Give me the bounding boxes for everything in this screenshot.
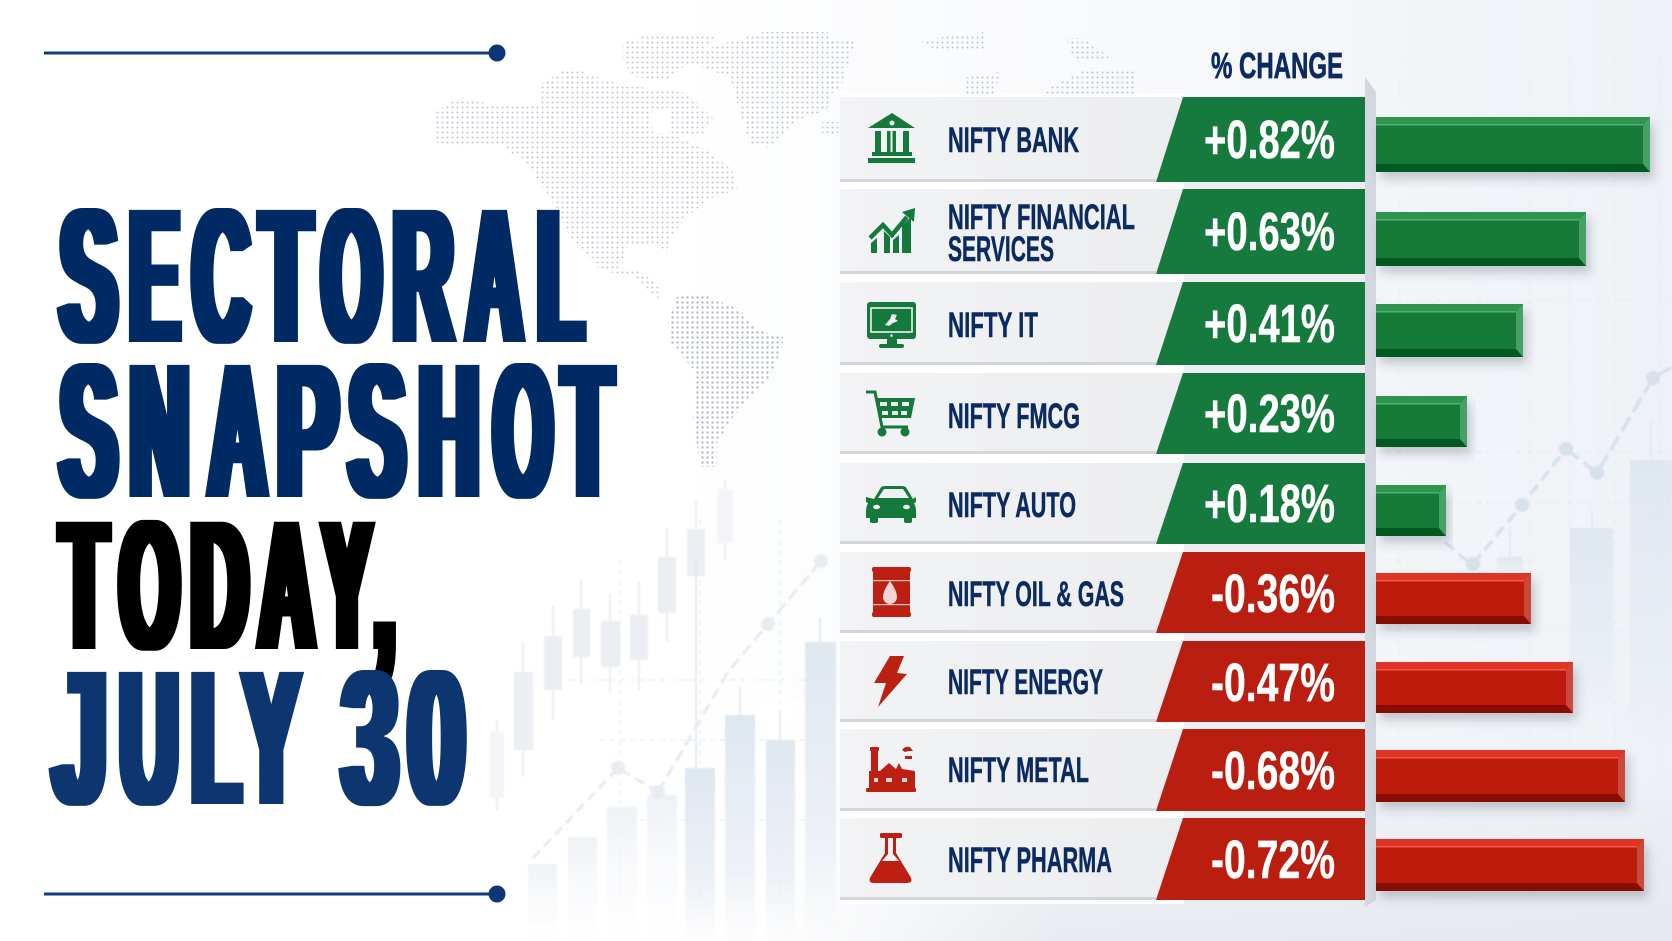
row: Nifty FMCG: +0.23% [1204,384,1335,444]
row: Nifty FMCG: NIFTY FMCG [948,397,1080,436]
row: Nifty Oil & Gas: -0.36% [1211,564,1335,624]
title: SECTORAL SNAPSHOT TODAY, JULY 30: N [130,323,189,538]
icon: rising chart [870,208,915,253]
title: SECTORAL SNAPSHOT TODAY, JULY 30: R [393,168,453,383]
table spine and backing [840,77,1376,907]
row: Nifty Financial Services: +0.63% [1204,202,1335,262]
title: SECTORAL SNAPSHOT TODAY, JULY 30: L [538,168,583,383]
row: Nifty Pharma [840,818,1365,900]
bottom rule with end dot [44,886,506,902]
bar: Nifty Energy -0.47% [1376,662,1573,713]
icon: shopping cart [866,392,915,436]
bar: Nifty Metal -0.68% [1376,750,1625,802]
row: Nifty Auto [840,463,1365,544]
bar: Nifty FMCG +0.23% [1376,396,1467,447]
dotted world map [433,32,1136,467]
icon: flask [870,833,911,883]
icon: computer monitor [867,302,916,348]
title: SECTORAL SNAPSHOT TODAY, JULY 30: T [61,483,107,689]
title: SECTORAL SNAPSHOT TODAY, JULY 30: 0 [408,630,465,845]
icon: oil barrel [872,567,911,617]
title: SECTORAL SNAPSHOT TODAY, JULY 30: U [120,630,178,845]
title: SECTORAL SNAPSHOT TODAY, JULY 30: L [192,630,240,845]
title: SECTORAL SNAPSHOT TODAY, JULY 30: A [209,323,266,538]
title: SECTORAL SNAPSHOT TODAY, JULY 30: H [419,323,479,538]
row: Nifty Oil & Gas: NIFTY OIL & GAS [948,575,1124,614]
row: Nifty Financial Services: NIFTY FINANCIAL [948,198,1135,237]
title: SECTORAL SNAPSHOT TODAY, JULY 30: P [277,323,338,538]
title: SECTORAL SNAPSHOT TODAY, JULY 30: A [467,168,522,383]
row: Nifty Metal: -0.68% [1211,741,1335,801]
icon: lightning bolt [874,656,907,707]
bar: Nifty Oil & Gas -0.36% [1376,573,1531,624]
title: SECTORAL SNAPSHOT TODAY, JULY 30: S [349,323,405,538]
row: Nifty Metal [840,729,1365,811]
row: Nifty IT: +0.41% [1204,294,1335,354]
title: SECTORAL SNAPSHOT TODAY, JULY 30: A [259,483,314,689]
row: Nifty Energy: -0.47% [1211,653,1335,713]
title: SECTORAL SNAPSHOT TODAY, JULY 30 [53,168,612,845]
bar: Nifty Financial Services +0.63% [1376,212,1586,266]
title: SECTORAL SNAPSHOT TODAY, JULY 30: Y [243,630,298,845]
row: Nifty Bank [840,97,1365,182]
text: T [563,323,612,538]
row: Nifty Pharma: -0.72% [1211,830,1335,890]
row: Nifty Oil & Gas [840,552,1365,633]
title: SECTORAL SNAPSHOT TODAY, JULY 30: 3 [342,630,398,845]
title: SECTORAL SNAPSHOT TODAY, JULY 30: S [60,323,117,538]
row: Nifty Auto: NIFTY AUTO [948,486,1076,525]
row: Nifty IT [840,282,1365,365]
title: SECTORAL SNAPSHOT TODAY, JULY 30: J [53,630,107,845]
row: Nifty Financial Services: SERVICES [948,230,1054,269]
title: SECTORAL SNAPSHOT TODAY, JULY 30: O [120,483,179,689]
row: Nifty Bank: +0.82% [1204,110,1335,170]
row: Nifty Bank: NIFTY BANK [948,121,1079,160]
icon: factory [866,747,916,792]
bar: Nifty Auto +0.18% [1376,485,1446,536]
title: SECTORAL SNAPSHOT TODAY, JULY 30: O [322,168,381,383]
title: SECTORAL SNAPSHOT TODAY, JULY 30: T [261,168,311,383]
row: Nifty Auto: +0.18% [1204,474,1335,534]
icon: bank [868,113,915,163]
bar: Nifty Pharma -0.72% [1376,839,1644,891]
top rule with end dot [44,44,506,62]
row: Nifty Energy [840,641,1365,722]
bar: Nifty Bank +0.82% [1376,117,1650,172]
column heading: % CHANGE: % CHANGE [1211,45,1343,86]
row: Nifty Energy: NIFTY ENERGY [948,663,1103,702]
row: Nifty FMCG [840,373,1365,454]
title: SECTORAL SNAPSHOT TODAY, JULY 30: O [494,323,552,538]
icon: car [866,486,916,523]
title: SECTORAL SNAPSHOT TODAY, JULY 30: Y [323,483,371,689]
title: SECTORAL SNAPSHOT TODAY, JULY 30: C [193,168,249,383]
bar: Nifty IT +0.41% [1376,304,1523,357]
title: SECTORAL SNAPSHOT TODAY, JULY 30: S [60,168,117,383]
title: SECTORAL SNAPSHOT TODAY, JULY 30: D [191,483,248,689]
title: SECTORAL SNAPSHOT TODAY, JULY 30: , [374,483,395,689]
row: Nifty Metal: NIFTY METAL [948,751,1089,790]
row: Nifty IT: NIFTY IT [948,306,1038,345]
bar chart: % change bars [1376,117,1650,891]
row: Nifty Pharma: NIFTY PHARMA [948,841,1112,880]
background chart: grid, candlesticks, columns and trend line [490,60,1672,941]
title: SECTORAL SNAPSHOT TODAY, JULY 30: E [130,168,179,383]
row: Nifty Financial Services [840,189,1365,274]
